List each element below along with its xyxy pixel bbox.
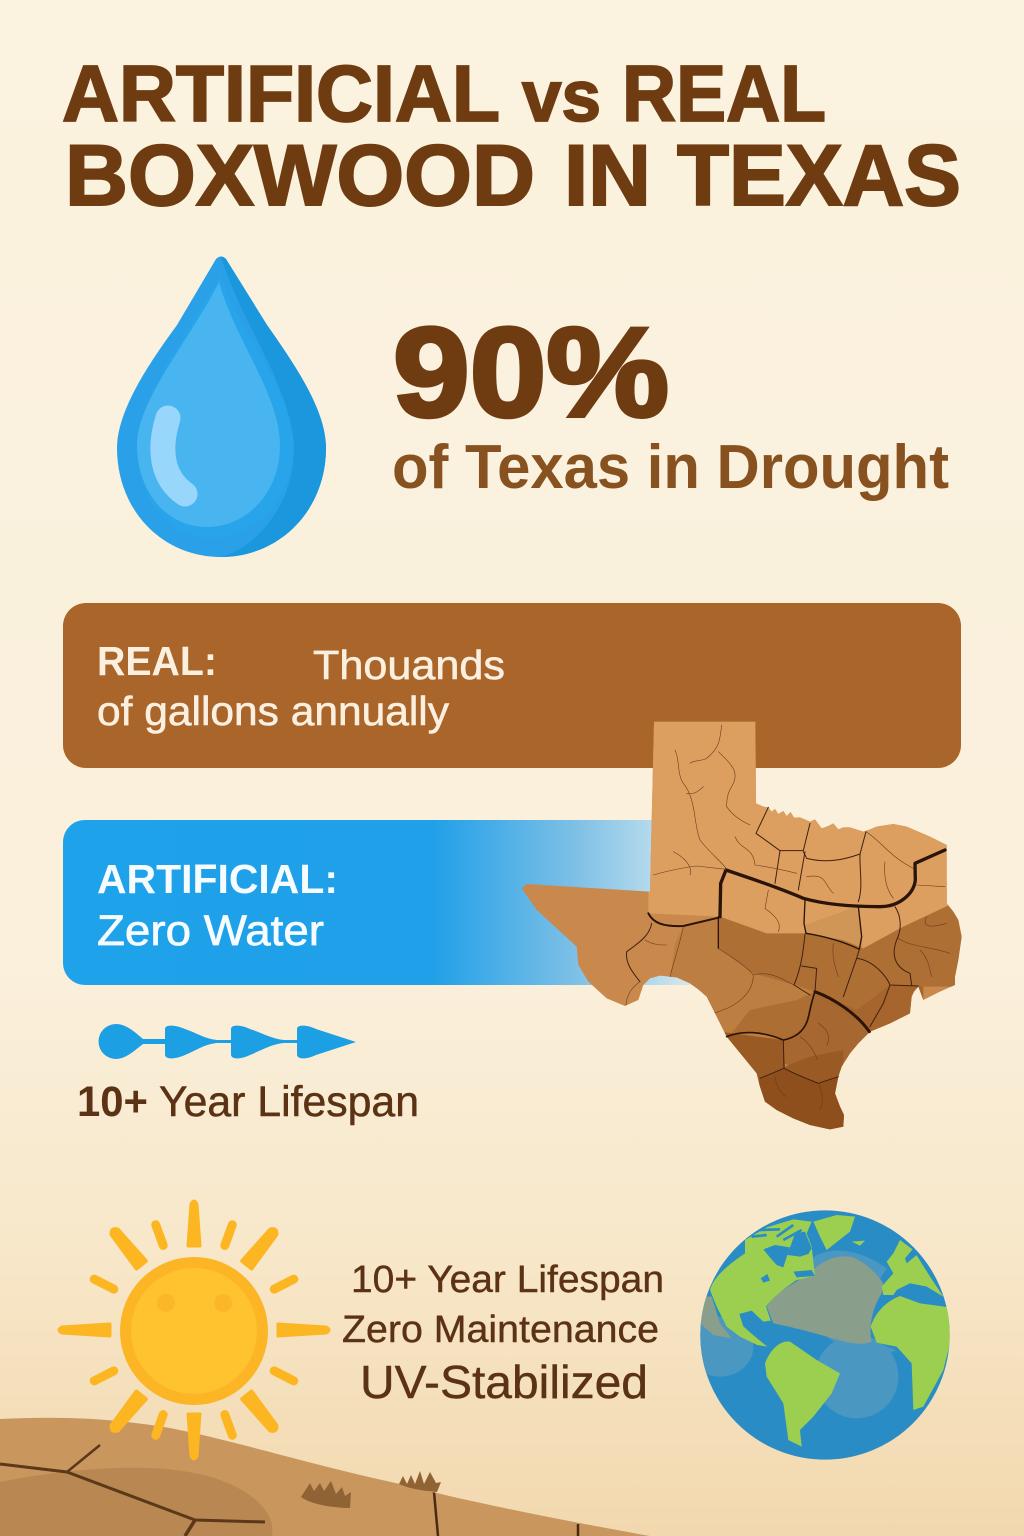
map: cracked Texas <box>522 722 962 1130</box>
panel: real boxwood water use: REAL: <box>97 638 217 684</box>
stat: 90 percent: of Texas in Drought <box>392 433 949 502</box>
icon: globe <box>687 1210 952 1460</box>
panel: artificial boxwood water use <box>63 820 700 985</box>
medium cracks <box>626 807 918 1083</box>
title: IN <box>564 128 651 224</box>
panel: real boxwood water use: of gallons annually <box>97 688 450 734</box>
label: lifespan: Year Lifespan <box>159 1078 419 1126</box>
panel: real boxwood water use: Thouands <box>313 642 505 688</box>
stat: 90 percent <box>392 301 949 502</box>
benefits list: 10+ Year Lifespan <box>351 1259 664 1301</box>
ground with cracks <box>0 1418 650 1536</box>
north america <box>710 1219 815 1347</box>
fine cracks <box>626 725 950 1110</box>
icon: grass tufts <box>301 1471 441 1508</box>
icon: sun <box>59 1201 329 1459</box>
panel: artificial boxwood water use: Zero Water <box>97 907 324 955</box>
benefits list: UV-Stabilized <box>360 1356 648 1408</box>
stat: 90 percent: 90% <box>393 301 669 443</box>
title: REAL <box>622 49 826 138</box>
icon: droplet arrow chain <box>98 1024 356 1059</box>
title: ARTIFICIAL <box>62 49 500 138</box>
benefits list: Zero Maintenance <box>342 1309 659 1351</box>
icon: water drop <box>117 256 326 557</box>
panel: artificial boxwood water use: ARTIFICIAL: <box>97 856 338 902</box>
title <box>62 49 961 224</box>
title: vs <box>522 57 601 137</box>
title: BOXWOOD <box>65 128 535 224</box>
panel: real boxwood water use <box>63 603 961 768</box>
thick cracks <box>648 850 945 1040</box>
label: lifespan: 10+ <box>77 1078 148 1126</box>
title: TEXAS <box>677 128 961 224</box>
benefits list <box>342 1259 664 1408</box>
